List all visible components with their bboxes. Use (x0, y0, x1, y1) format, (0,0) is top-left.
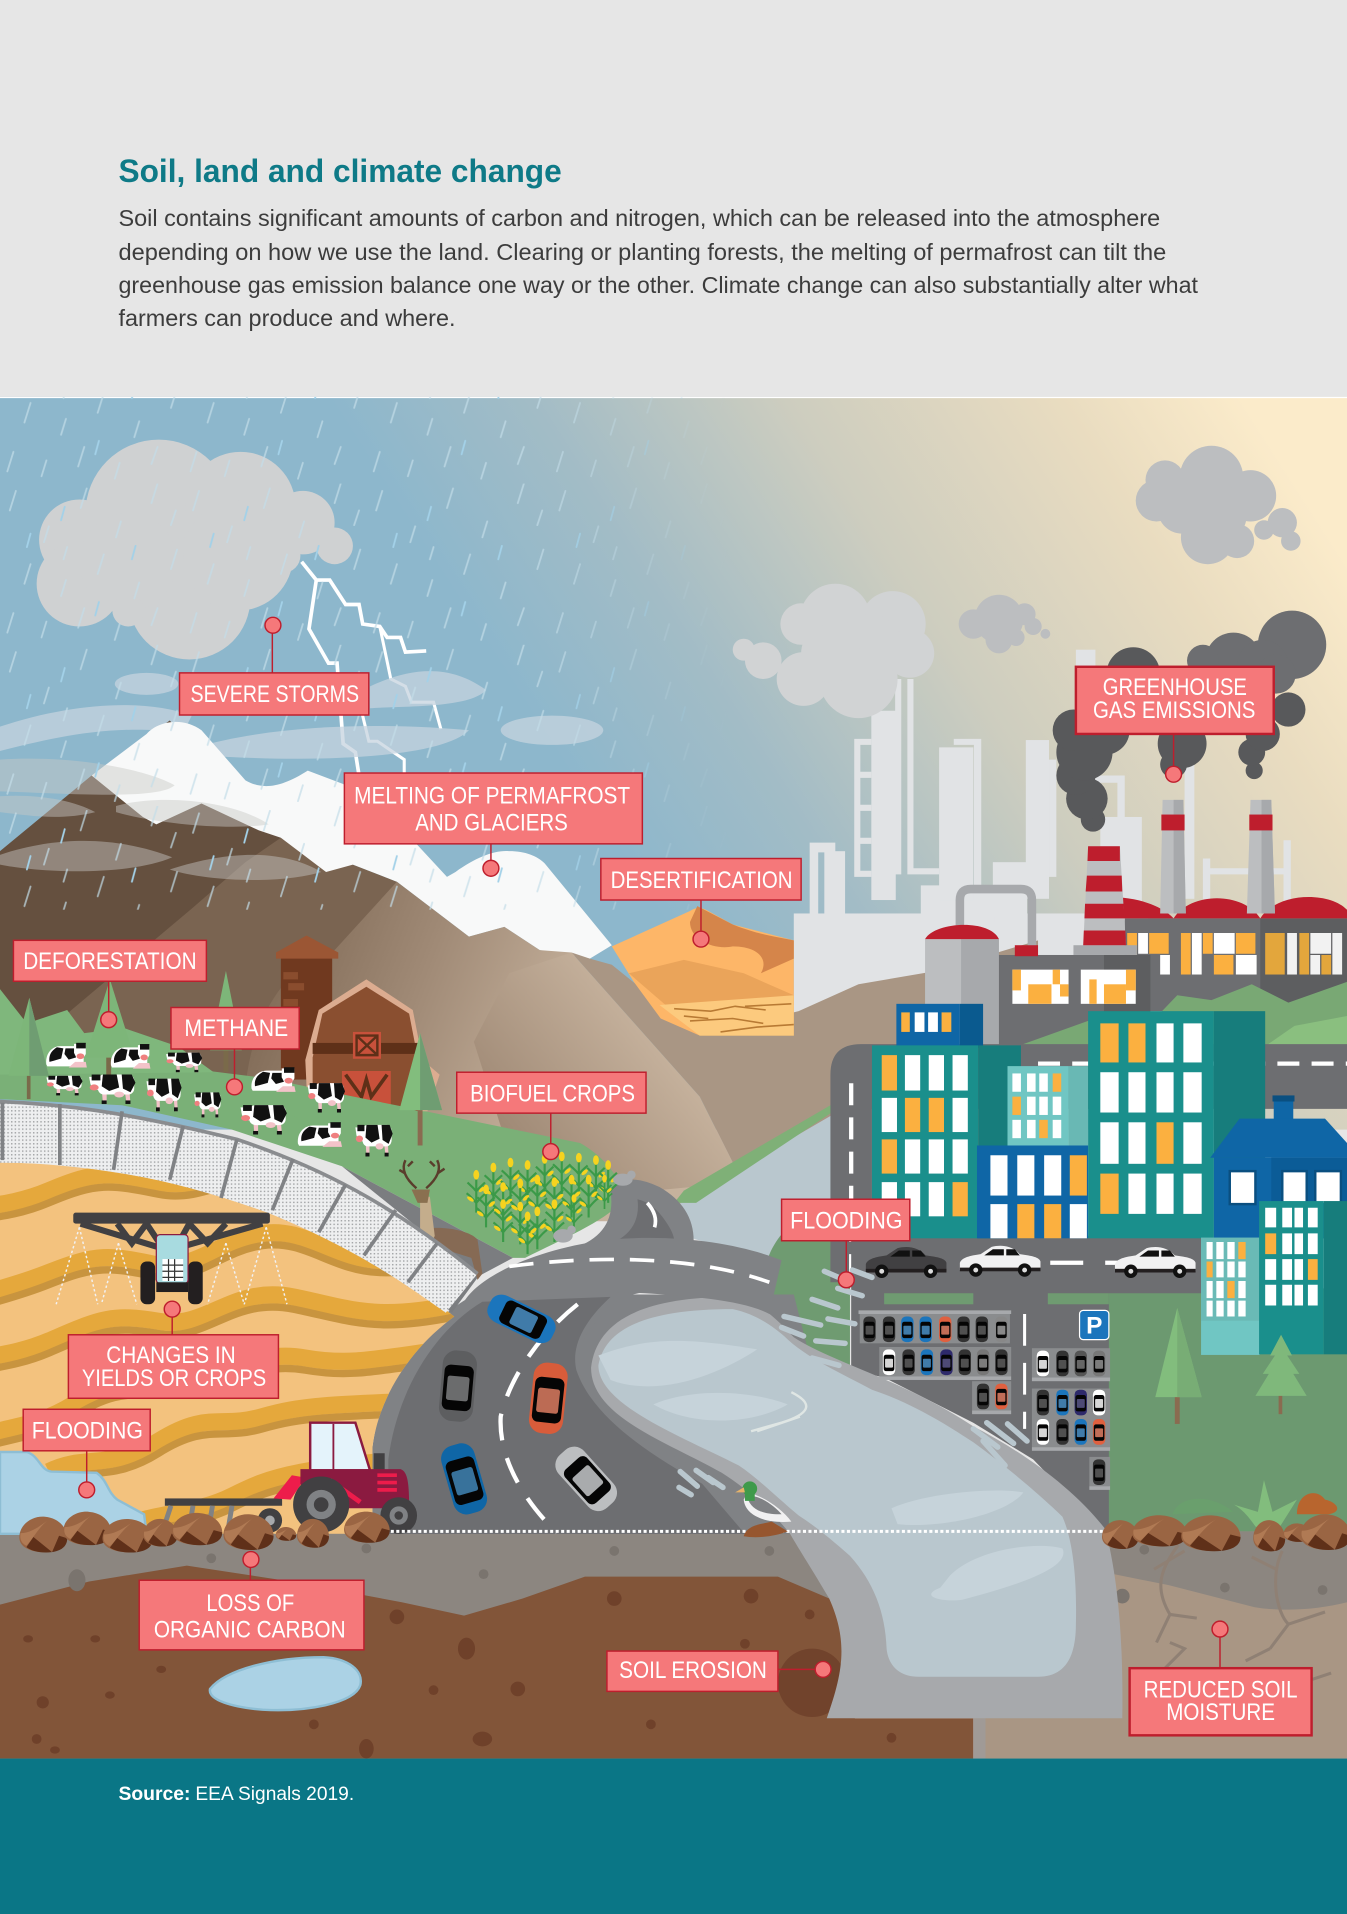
intro text block: depending on how we use the land. Clearing or planting forests, the melting of permafrost can tilt the (118, 239, 1166, 265)
intro text block (118, 205, 1199, 331)
road upper branch outer (574, 1180, 694, 1248)
herd of cows (46, 1043, 393, 1156)
road upper branch inner (617, 1199, 674, 1241)
callout: flooding city: FLOODING (790, 1208, 902, 1235)
rabbits (553, 1171, 636, 1243)
callout: changes in yields or crops: CHANGES IN (106, 1342, 236, 1369)
boulders right (1102, 1514, 1347, 1551)
grey soil patch on right (1105, 1531, 1347, 1610)
callout: changes in yields or crops (68, 1301, 278, 1398)
cloud: centre light cloud (733, 584, 934, 718)
callout: loss of organic carbon: LOSS OF (206, 1590, 294, 1617)
pasture foreground tree (399, 1033, 442, 1145)
callout: deforestation: DEFORESTATION (23, 948, 197, 975)
eroded dark hollow (778, 1649, 846, 1717)
building: blue block B (977, 1145, 1088, 1238)
flood water left (0, 1452, 147, 1534)
river: grey bank (591, 1297, 1122, 1718)
callout: melting of permafrost and glaciers: MELTING OF PERMAFROST (354, 783, 630, 810)
barn (305, 979, 440, 1114)
factory centre block (999, 945, 1150, 1048)
corn crop (466, 1152, 618, 1254)
crop-spraying tractor (56, 1213, 287, 1304)
cloud: small grey cloud (959, 595, 1050, 653)
road underlay filling gaps (513, 1294, 855, 1534)
grey soil pebbles (68, 1544, 1327, 1603)
building: teal block A (872, 1045, 1021, 1238)
callout: severe storms: SEVERE STORMS (191, 681, 359, 708)
near green hills (1266, 1016, 1347, 1050)
mountain fog overlay (0, 759, 321, 880)
intro text block: greenhouse gas emission balance one way or the other. Climate change can also substantially alter what (118, 272, 1199, 298)
city street and parking lot (851, 1236, 1203, 1534)
grass edge of upper channel (674, 1105, 843, 1203)
red tractor and plough (164, 1423, 417, 1534)
industrial tank and pipe (925, 889, 1032, 1049)
callout: greenhouse gas emissions: GAS EMISSIONS (1093, 697, 1255, 724)
flood splashes (679, 1270, 1027, 1495)
river highlights (598, 1341, 1063, 1600)
callout: desertification: DESERTIFICATION (611, 867, 793, 894)
header panel background (0, 0, 1347, 397)
callout: soil erosion: SOIL EROSION (619, 1657, 767, 1684)
building: small blue block (896, 1004, 983, 1048)
grey verge beside fence (342, 1166, 513, 1313)
callout: methane (171, 1007, 299, 1095)
mountain: foreground ridge (474, 953, 742, 1203)
callout: reduced soil moisture: MOISTURE (1166, 1699, 1275, 1726)
parking sign (1080, 1310, 1109, 1340)
callout: reduced soil moisture (1130, 1621, 1312, 1735)
callout: melting of permafrost and glaciers: AND GLACIERS (415, 809, 568, 836)
lower road outer (372, 1270, 794, 1534)
parked cars (859, 1310, 1110, 1490)
grass lawn (1105, 1288, 1347, 1533)
trees on lawn (1155, 1308, 1307, 1424)
callout: melting of permafrost and glaciers (344, 773, 642, 876)
green field (0, 1060, 622, 1258)
intro text block: Soil contains significant amounts of carbon and nitrogen, which can be released into the atmosphere (118, 205, 1160, 231)
mountain snow cap (92, 722, 612, 959)
far green hills behind city (1020, 982, 1347, 1050)
building: blue house (1210, 1095, 1347, 1238)
callout: biofuel crops (457, 1072, 646, 1160)
overpass road (464, 1203, 782, 1314)
callout: flooding field: FLOODING (32, 1418, 143, 1445)
dried soil cracks (1154, 1545, 1331, 1685)
lightning bolts (302, 562, 441, 775)
brown soil layer (0, 1566, 973, 1759)
shrubs and squirrel by right rocks (1172, 1480, 1337, 1533)
building: large teal block (1088, 1011, 1265, 1238)
callout: flooding field (23, 1409, 150, 1498)
building: pale teal front block (1201, 1238, 1260, 1355)
dotted ground line (391, 1530, 1105, 1533)
tan ground behind city (572, 940, 1038, 1270)
callout: methane: METHANE (184, 1015, 288, 1042)
green foreground over barn base (269, 1084, 440, 1148)
cloud: upper right grey cloud (1136, 446, 1301, 564)
callout: reduced soil moisture: REDUCED SOIL (1144, 1676, 1298, 1703)
soil pebbles (23, 1589, 896, 1759)
striped chimney (1073, 846, 1137, 955)
green bank pocket (767, 1203, 850, 1380)
intro text block: farmers can produce and where. (118, 305, 456, 331)
upper river channel (679, 1105, 872, 1264)
mountain: back dark peak (0, 721, 440, 1099)
duck on rock (735, 1481, 791, 1537)
barn silo (276, 935, 338, 1080)
callout: deforestation (13, 940, 206, 1028)
smoke plumes (1053, 611, 1326, 832)
road cars (866, 1246, 1196, 1278)
city cross roads (830, 1044, 1347, 1282)
desert dunes (612, 906, 794, 1036)
callout: soil erosion (607, 1651, 831, 1691)
cloud: large storm cloud (37, 440, 353, 659)
upper grey soil layer (0, 1531, 855, 1715)
pond (210, 1657, 361, 1710)
callout: flooding city (782, 1199, 910, 1288)
river: water surface (598, 1309, 1076, 1677)
chain-link fence (0, 1102, 477, 1313)
callout: changes in yields or crops: YIELDS OR CROPS (82, 1365, 266, 1392)
mountain: light ridge (244, 882, 757, 1221)
back hills behind pasture (0, 989, 214, 1075)
wispy fog above mountains (0, 671, 603, 759)
source note: Source: (118, 1783, 191, 1805)
road cars top view (438, 1290, 623, 1518)
rain (0, 397, 733, 910)
trees in pasture (9, 971, 242, 1099)
callout: loss of organic carbon (139, 1552, 364, 1650)
building: teal front block (1259, 1201, 1347, 1354)
lower road inner (388, 1297, 745, 1534)
callout: greenhouse gas emissions: GREENHOUSE (1103, 674, 1247, 701)
boulders left (19, 1512, 390, 1553)
mountain: mid brown layer (67, 838, 501, 1099)
footer band (0, 1759, 1347, 1914)
source note (118, 1783, 354, 1805)
illustration: sky (0, 397, 1347, 1130)
right tan soil (973, 1531, 1347, 1759)
city skyline silhouette (794, 650, 1291, 1036)
callout: greenhouse gas emissions (1076, 667, 1274, 782)
deer (399, 1160, 482, 1280)
factory sheds with red roofs (1122, 897, 1347, 1011)
lower road centre line (501, 1304, 578, 1533)
parking sign: P (1086, 1313, 1102, 1340)
arable field with furrows (0, 1160, 488, 1539)
source note: EEA Signals 2019. (195, 1783, 354, 1805)
grey chimneys (1160, 800, 1275, 913)
building: light teal block (1008, 1066, 1088, 1152)
callout: severe storms (180, 617, 369, 715)
callout: desertification (601, 859, 801, 947)
title: Soil, land and climate change (118, 153, 562, 189)
callout: biofuel crops: BIOFUEL CROPS (470, 1081, 635, 1108)
soil column (973, 1718, 986, 1759)
callout: loss of organic carbon: ORGANIC CARBON (154, 1617, 346, 1644)
